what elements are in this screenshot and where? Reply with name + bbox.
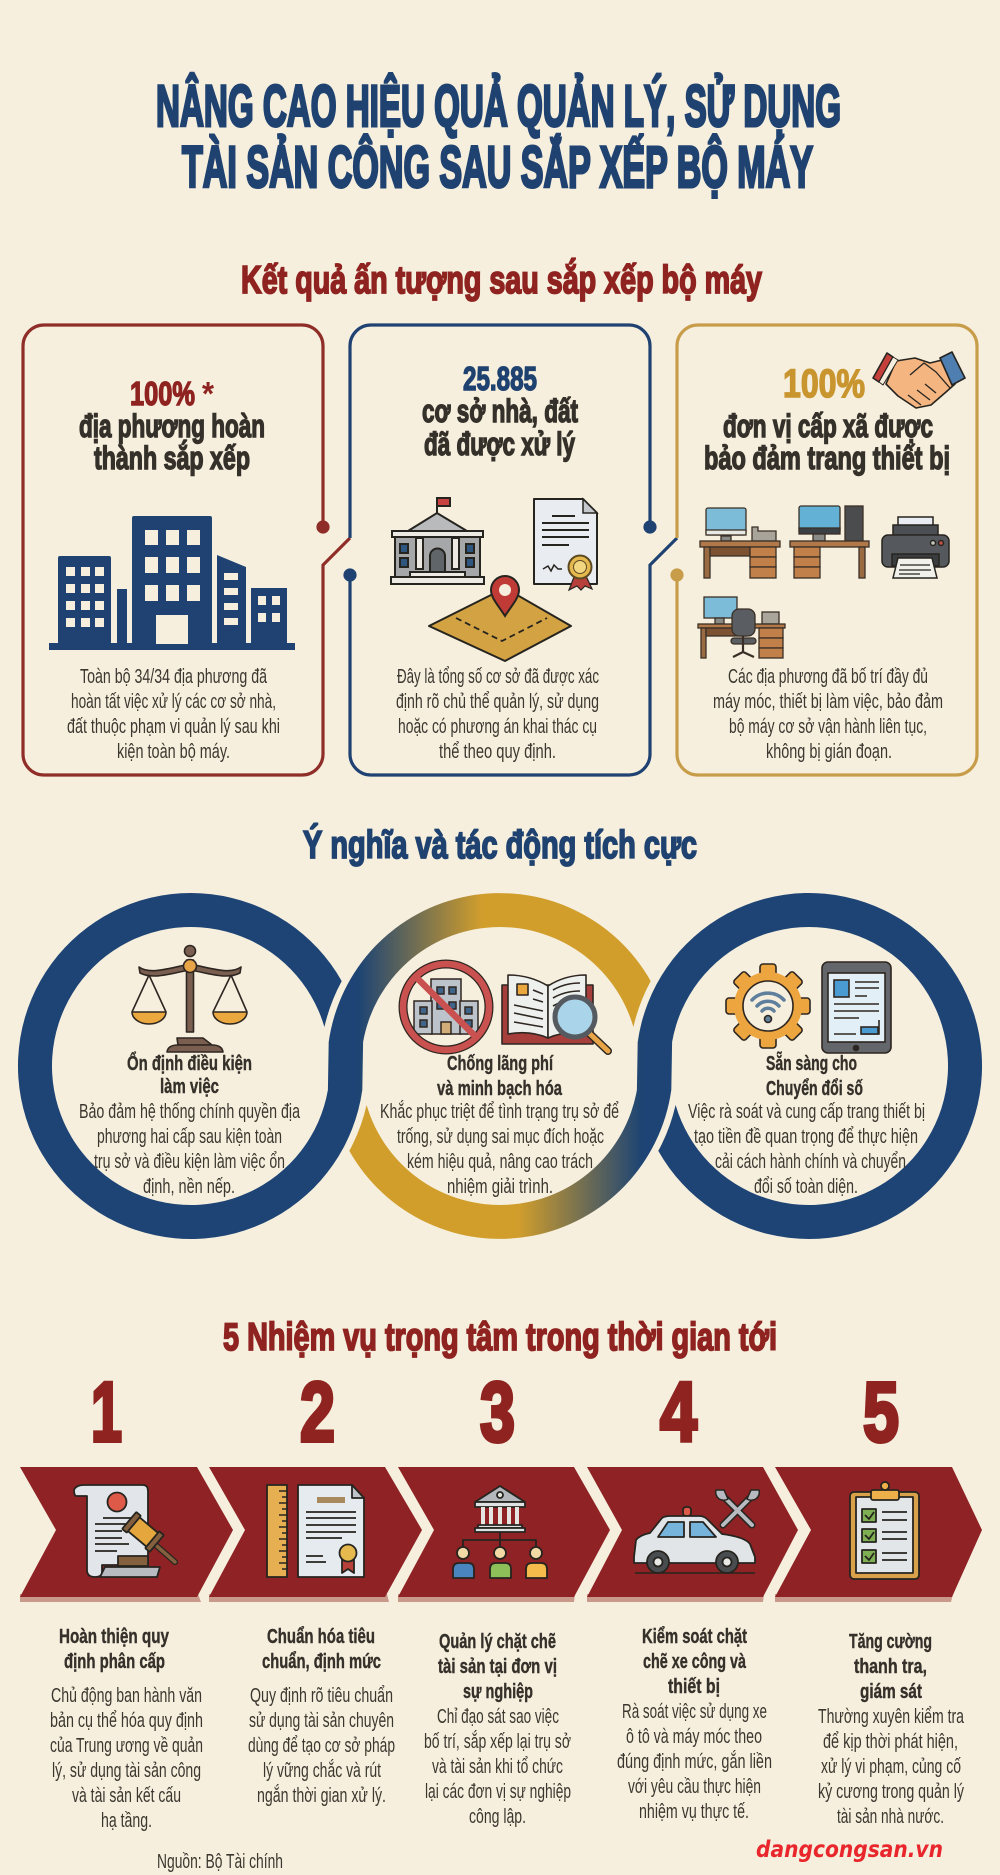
- task 1 text: [50, 1626, 203, 1832]
- card 3 stat: [704, 362, 950, 476]
- task 5 text: [818, 1631, 965, 1828]
- task 1 text: bản cụ thể hóa quy định: [50, 1710, 203, 1732]
- task 2 text: Chuẩn hóa tiêu: [267, 1626, 375, 1648]
- title: [156, 74, 841, 200]
- task 2 text: Quy định rõ tiêu chuẩn: [250, 1685, 393, 1707]
- icon: prohibited building: [403, 964, 489, 1050]
- task 5 text: tài sản nhà nước.: [837, 1806, 944, 1828]
- card 2 stat: đã được xử lý: [424, 426, 575, 462]
- task 3 text: lại các đơn vị sự nghiệp: [425, 1781, 571, 1803]
- task 5 text: Tăng cường: [849, 1631, 932, 1653]
- task 1 text: lý, sử dụng tài sản công: [52, 1760, 201, 1782]
- text: stable working conditions: Ổn định điều kiện: [127, 1051, 252, 1075]
- text: anti waste: Khắc phục triệt để tình trạng trụ sở để: [380, 1100, 619, 1123]
- task 2 text: lý vững chắc và rút: [263, 1759, 381, 1782]
- icon: ruler and document: [267, 1485, 364, 1577]
- task 3 text: Quản lý chặt chẽ: [439, 1631, 556, 1653]
- card 2 outline: [345, 325, 677, 775]
- text: anti waste: nhiệm giải trình.: [447, 1176, 553, 1198]
- step numbers: [91, 1365, 899, 1459]
- task 3 text: tài sản tại đơn vị: [438, 1656, 557, 1678]
- task 3 text: Chỉ đạo sát sao việc: [437, 1706, 559, 1728]
- text: digital transformation: cải cách hành chính và chuyển: [715, 1151, 906, 1173]
- task 4 text: Kiểm soát chặt: [642, 1626, 747, 1648]
- card 2 stat: [422, 360, 578, 462]
- icon: printer: [882, 517, 949, 578]
- source: Nguồn: Bộ Tài chính: [157, 1851, 283, 1873]
- icon: scales: [132, 946, 247, 1052]
- panel: card 2: [345, 325, 677, 775]
- task 4 text: nhiệm vụ thực tế.: [639, 1801, 749, 1823]
- task 3 text: công lập.: [469, 1806, 526, 1828]
- text: stable working conditions: làm việc: [160, 1076, 219, 1098]
- card 1 text: kiện toàn bộ máy.: [117, 741, 230, 763]
- task 1 text: hạ tầng.: [101, 1810, 152, 1832]
- task 1 text: Chủ động ban hành văn: [51, 1685, 202, 1707]
- step numbers: 5: [863, 1365, 899, 1459]
- task 4 text: thiết bị: [668, 1676, 720, 1698]
- task 4 text: với yêu cầu thực hiện: [628, 1776, 761, 1798]
- icon: desk with monitor: [700, 508, 780, 578]
- card 1 stat: [79, 375, 265, 476]
- text: digital transformation: tạo tiền đề quan trọng để thực hiện: [694, 1126, 918, 1148]
- text: anti waste: trống, sử dụng sai mục đích hoặc: [397, 1126, 604, 1148]
- task 1 text: định phân cấp: [64, 1651, 165, 1673]
- task 2 text: chuẩn, định mức: [262, 1651, 381, 1673]
- card 3 text: không bị gián đoạn.: [766, 741, 892, 763]
- text: anti waste: [380, 1053, 619, 1198]
- text: anti waste: và minh bạch hóa: [437, 1078, 563, 1100]
- heading: results: Kết quả ấn tượng sau sắp xếp bộ máy: [241, 258, 762, 302]
- icon: checklist clipboard: [850, 1482, 919, 1579]
- heading: impact: Ý nghĩa và tác động tích cực: [303, 823, 697, 867]
- chevrons: [20, 1467, 982, 1597]
- icon: desk with chair: [698, 597, 785, 658]
- task 1 text: Hoàn thiện quy: [59, 1626, 170, 1648]
- icon: land plot and pin: [429, 576, 571, 661]
- task 3 text: bố trí, sắp xếp lại trụ sở: [424, 1730, 571, 1753]
- task 2 text: sử dụng tài sản chuyên: [249, 1710, 394, 1732]
- card 1 stat: địa phương hoàn: [79, 408, 265, 444]
- text: digital transformation: [688, 1051, 925, 1198]
- task 3 text: và tài sản khi tổ chức: [432, 1756, 563, 1778]
- card 1 text: hoàn tất việc xử lý các cơ sở nhà,: [71, 691, 276, 713]
- icon: desk with desktop tower: [790, 506, 869, 578]
- panel: card 3: [672, 325, 977, 775]
- task 4 text: chẽ xe công và: [643, 1651, 747, 1673]
- card 1 stat: thành sắp xếp: [94, 440, 250, 476]
- icon: institution with people: [453, 1486, 547, 1578]
- task 2 text: [248, 1626, 395, 1807]
- task 5 text: thanh tra,: [854, 1656, 927, 1678]
- text: digital transformation: đổi số toàn diện.: [754, 1176, 858, 1198]
- text: stable working conditions: trụ sở và điều kiện làm việc ổn: [94, 1151, 285, 1173]
- step numbers: 1: [91, 1365, 122, 1459]
- text: digital transformation: Sẵn sàng cho: [766, 1051, 857, 1075]
- card 1 text: Toàn bộ 34/34 địa phương đã: [80, 666, 268, 688]
- heading: five tasks: 5 Nhiệm vụ trọng tâm trong thời gian tới: [223, 1316, 777, 1359]
- card 2 stat: cơ sở nhà, đất: [422, 393, 578, 429]
- icon: government building: [391, 498, 484, 584]
- card 2 text: [396, 666, 599, 763]
- chart: interlocking rings: [18, 893, 982, 1239]
- step numbers: 3: [480, 1365, 515, 1459]
- card 1 outline: [23, 325, 350, 775]
- icon: open book with magnifier: [502, 975, 608, 1051]
- card 2 text: hoặc có phương án khai thác cụ: [398, 716, 597, 738]
- icon: gear with wifi: [726, 964, 810, 1048]
- text: stable working conditions: [79, 1051, 301, 1198]
- task 2 text: dùng để tạo cơ sở pháp: [248, 1735, 395, 1757]
- text: anti waste: Chống lãng phí: [447, 1053, 554, 1075]
- task 1 text: và tài sản kết cấu: [72, 1785, 181, 1807]
- task 2 text: ngắn thời gian xử lý.: [257, 1784, 386, 1807]
- icon: car and wrenches: [634, 1490, 759, 1573]
- card 1 text: đất thuộc phạm vi quản lý sau khi: [67, 716, 280, 738]
- icon: tablet: [822, 962, 891, 1053]
- panel: anti waste and transparency: [380, 964, 619, 1198]
- task 4 text: Rà soát việc sử dụng xe: [622, 1701, 767, 1723]
- panel: stable working conditions: [79, 946, 301, 1198]
- text: anti waste: kém hiệu quả, nâng cao trách: [407, 1151, 593, 1173]
- card 1 stat: 100%: [130, 375, 195, 412]
- panel: digital transformation: [688, 962, 925, 1198]
- icon: handshake: [873, 352, 965, 408]
- step numbers: 2: [300, 1365, 335, 1459]
- task 4 text: ô tô và máy móc theo: [626, 1726, 762, 1748]
- card 2 text: định rõ chủ thể quản lý, sử dụng: [396, 691, 599, 713]
- task 4 text: đúng định mức, gắn liền: [617, 1750, 772, 1773]
- panel: card 1: [23, 325, 350, 775]
- text: digital transformation: Chuyển đổi số: [766, 1078, 863, 1100]
- task 3 text: sự nghiệp: [463, 1681, 533, 1703]
- chevron shadows: [20, 1594, 953, 1602]
- card 1 text: [67, 666, 280, 763]
- icon: city buildings: [49, 516, 295, 650]
- card 3 text: [713, 666, 943, 763]
- task 4 text: [617, 1626, 772, 1823]
- card 2 stat: 25.885: [463, 360, 537, 397]
- card 2 text: Đây là tổng số cơ sở đã được xác: [397, 666, 599, 688]
- logo: dangcongsan.vn: dangcongsan.vn: [756, 1837, 943, 1863]
- task 3 text: [424, 1631, 571, 1828]
- text: stable working conditions: định, nền nếp.: [143, 1176, 235, 1198]
- chevron band: [20, 1467, 982, 1602]
- task 5 text: giám sát: [860, 1681, 922, 1703]
- icon: certificate document: [534, 499, 597, 590]
- card 3 stat: 100%: [783, 362, 865, 406]
- card 3 outline: [672, 325, 977, 775]
- card 1 stat: *: [202, 375, 214, 412]
- text: stable working conditions: phương hai cấp sau kiện toàn: [97, 1126, 282, 1148]
- icon: decree scroll and gavel: [74, 1485, 175, 1577]
- text: stable working conditions: Bảo đảm hệ thống chính quyền địa: [79, 1101, 301, 1123]
- task 1 text: của Trung ương về quản: [50, 1735, 203, 1757]
- card 2 text: thể theo quy định.: [439, 741, 556, 763]
- step numbers: 4: [660, 1365, 697, 1459]
